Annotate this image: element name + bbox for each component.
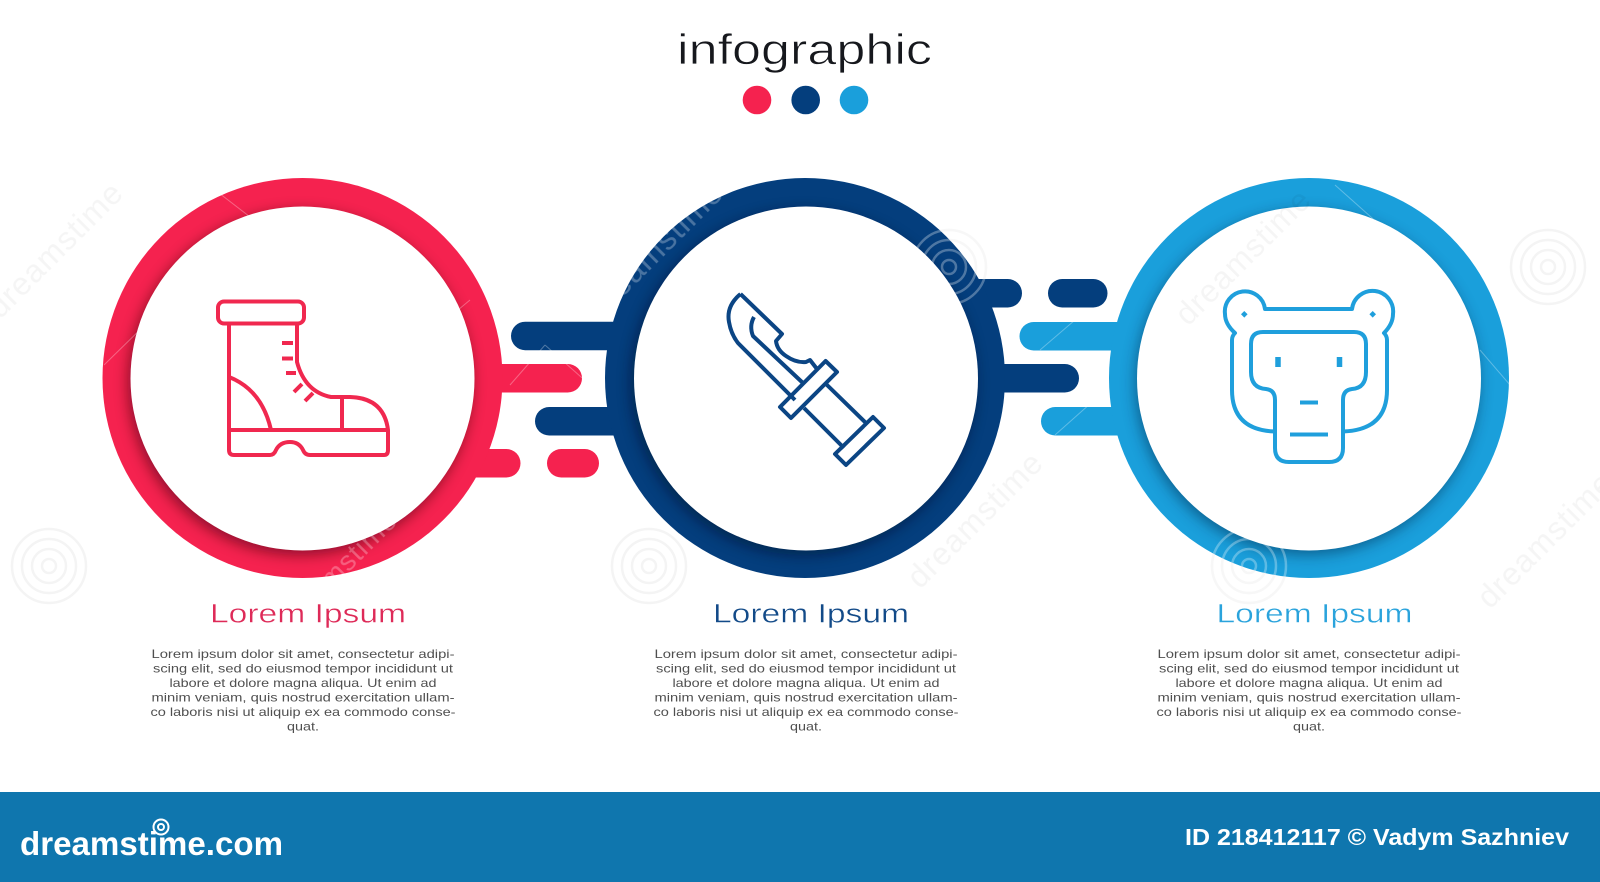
text block: pink column: labore et dolore magna aliqua. Ut enim ad <box>170 676 436 690</box>
text block: pink column: scing elit, sed do eiusmod tempor incididunt ut <box>153 662 454 676</box>
text block: pink column: Lorem ipsum dolor sit amet, consectetur adipi- <box>152 647 454 661</box>
text block: blue column: quat. <box>1293 720 1325 734</box>
connector bars: pink <box>440 364 599 478</box>
text block: navy column <box>654 647 958 734</box>
text block: navy column: quat. <box>790 720 822 734</box>
heading: Lorem Ipsum navy: Lorem Ipsum <box>713 599 909 629</box>
text block: navy column: Lorem ipsum dolor sit amet, consectetur adipi- <box>654 647 958 661</box>
text block: blue column <box>1156 647 1462 734</box>
panel: knife step <box>511 178 1108 734</box>
ring: pink <box>102 178 502 578</box>
text block: navy column: labore et dolore magna aliqua. Ut enim ad <box>672 676 940 690</box>
watermark overlay on rings: dreamstime <box>579 174 730 325</box>
panel: monkey step <box>1020 178 1509 734</box>
text block: blue column: labore et dolore magna aliqua. Ut enim ad <box>1176 676 1442 690</box>
title: infographic <box>677 26 932 74</box>
watermark text on white <box>0 174 1600 615</box>
footer bar <box>0 792 1600 882</box>
colour dots <box>743 86 868 114</box>
text block: pink column <box>150 647 456 734</box>
text block: navy column: co laboris nisi ut aliquip ex ea commodo conse- <box>654 705 958 719</box>
watermark spirals <box>12 230 1585 603</box>
footer logo text: dreamstime.com <box>20 825 283 862</box>
ring: blue <box>1109 178 1509 578</box>
text block: pink column: quat. <box>287 720 319 734</box>
text block: blue column: minim veniam, quis nostrud exercitation ullam- <box>1158 691 1460 705</box>
icon: knife <box>728 294 884 465</box>
text block: pink column: minim veniam, quis nostrud exercitation ullam- <box>152 691 454 705</box>
watermark overlay on rings: mstime <box>313 504 403 594</box>
icon: boot <box>218 302 388 455</box>
text block: blue column: Lorem ipsum dolor sit amet, consectetur adipi- <box>1158 647 1460 661</box>
text block: blue column: scing elit, sed do eiusmod tempor incididunt ut <box>1159 662 1460 676</box>
footer credit text: ID 218412117 © Vadym Sazhniev <box>1185 824 1569 850</box>
watermark text on white: dreamstime <box>899 444 1050 595</box>
text block: navy column: minim veniam, quis nostrud exercitation ullam- <box>654 691 958 705</box>
icon: monkey <box>1225 291 1393 462</box>
watermark overlay on rings <box>104 174 1510 603</box>
connector bars: blue <box>1020 322 1161 436</box>
panel: boot step <box>102 178 599 734</box>
text block: blue column: co laboris nisi ut aliquip ex ea commodo conse- <box>1156 705 1462 719</box>
watermark text inside blue ring: dreamstime <box>1167 181 1318 332</box>
connector bars: navy <box>511 279 1108 436</box>
text block: navy column: scing elit, sed do eiusmod tempor incididunt ut <box>656 662 957 676</box>
text block: pink column: co laboris nisi ut aliquip ex ea commodo conse- <box>150 705 456 719</box>
ring: navy <box>605 178 1005 578</box>
heading: Lorem Ipsum blue: Lorem Ipsum <box>1216 599 1412 629</box>
icon: logo swirl <box>154 820 168 834</box>
heading: Lorem Ipsum pink: Lorem Ipsum <box>210 599 406 629</box>
